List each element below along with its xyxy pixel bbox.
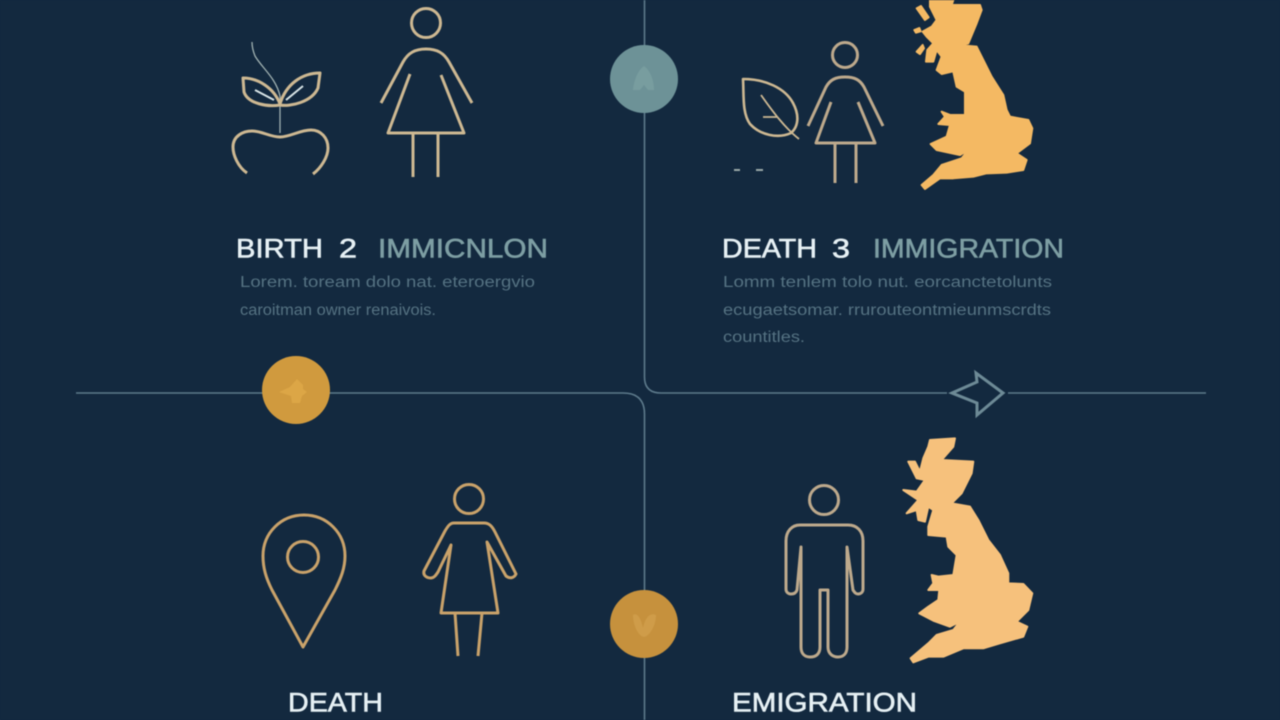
arrow: [952, 373, 1003, 415]
body text: death and immigration: Lomm tenlem tolo nut. eorcanctetolunts: [723, 274, 1052, 291]
heading: emigration: EMIGRATION: [732, 688, 917, 718]
body text: birth and immigration: Lorem. toream dolo nat. eteroergvio: [240, 274, 535, 291]
node: teal circle: [610, 45, 678, 113]
node: bottom gold circle: [610, 590, 678, 658]
body text: death and immigration: [723, 274, 1052, 346]
icon: woman figure: [424, 484, 516, 656]
icon: woman figure: [381, 8, 472, 177]
heading: birth and immigration: 2: [339, 234, 357, 264]
body text: birth and immigration: [240, 274, 535, 319]
heading: death and immigration: IMMIGRATION: [873, 234, 1064, 264]
icon: man figure: [786, 486, 863, 657]
heading: death and immigration: DEATH: [722, 234, 817, 264]
icon: leaf: [734, 79, 799, 170]
heading: birth and immigration: [236, 234, 548, 264]
heading: death: DEATH: [288, 688, 383, 718]
node: left gold circle: [262, 356, 330, 424]
panel: death and immigration: [722, 0, 1064, 346]
map: united kingdom, top: [914, 0, 1032, 189]
heading: death and immigration: 3: [832, 234, 850, 264]
body text: death and immigration: ecugaetsomar. rrurouteontmieunmscrdts: [723, 302, 1051, 319]
panel: birth and immigration: [233, 8, 548, 319]
body text: death and immigration: countitles.: [723, 329, 805, 346]
icon: sprout: [233, 42, 328, 174]
body text: birth and immigration: caroitman owner renaivois.: [240, 302, 436, 319]
heading: death and immigration: [722, 234, 1064, 264]
heading: birth and immigration: BIRTH: [236, 234, 323, 264]
icon: woman figure: [808, 42, 883, 183]
panel: emigration: [732, 438, 1032, 718]
panel: death: [263, 484, 516, 718]
heading: birth and immigration: IMMICNLON: [378, 234, 548, 264]
map: united kingdom, bottom: [903, 438, 1032, 662]
icon: location pin: [263, 515, 345, 647]
